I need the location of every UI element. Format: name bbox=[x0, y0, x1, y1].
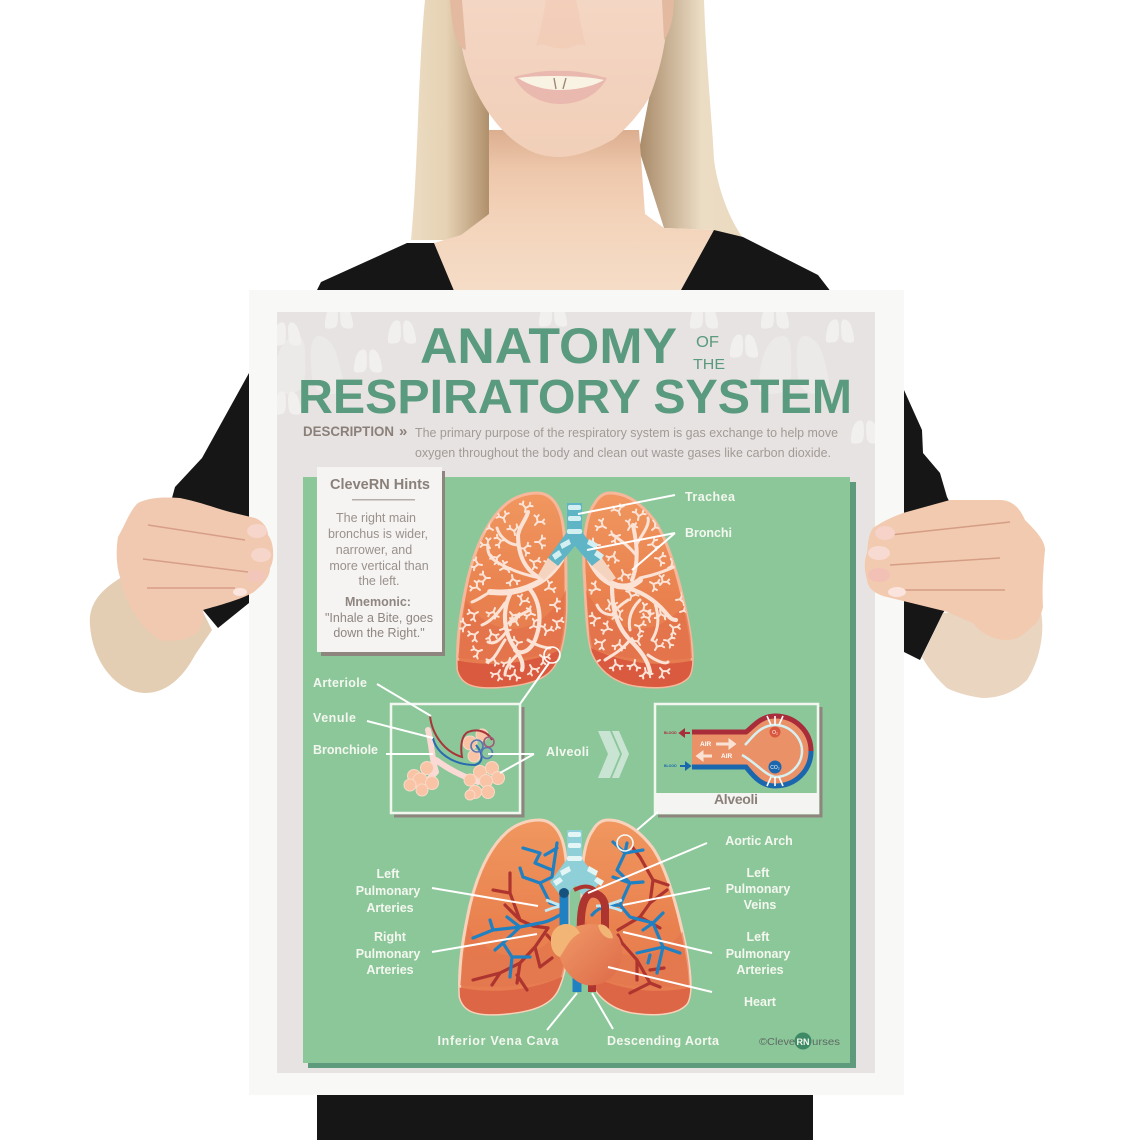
alveoli detail box right bbox=[630, 704, 821, 836]
detail circle bbox=[617, 835, 633, 851]
mouth bbox=[514, 71, 607, 104]
label: left pulmonary arteries (left side): Left bbox=[377, 867, 400, 881]
logo bbox=[759, 1032, 840, 1050]
label: left pulmonary arteries (right side): Left bbox=[747, 930, 770, 944]
green panel bbox=[303, 477, 856, 1068]
face bbox=[457, 0, 668, 157]
label: left pulmonary arteries (right side): Arteries bbox=[736, 963, 784, 977]
red vessels right bbox=[618, 848, 668, 993]
description bbox=[303, 423, 838, 460]
trachea bbox=[538, 503, 616, 582]
blood labels: BLOOD bbox=[664, 764, 677, 768]
label: aortic arch: Aortic Arch bbox=[725, 834, 793, 848]
label: left pulmonary veins: Left bbox=[747, 866, 770, 880]
card shadow bbox=[321, 471, 445, 656]
card body text: the left. bbox=[358, 574, 400, 588]
vena cava bbox=[564, 890, 577, 992]
alveolus diagram: O₂ bbox=[772, 730, 778, 736]
left forearm bbox=[90, 577, 212, 693]
black shirt shoulders bbox=[307, 230, 845, 310]
labels: alveoli bbox=[313, 676, 589, 773]
watermark lungs bbox=[273, 303, 879, 444]
air labels: AIR bbox=[721, 753, 732, 760]
air labels: AIR bbox=[700, 741, 712, 748]
leader lines bbox=[367, 684, 534, 773]
gas circles bbox=[770, 726, 780, 738]
leader lines bbox=[432, 843, 712, 1030]
label: descending aorta: Descending Aorta bbox=[607, 1034, 720, 1048]
heart bbox=[551, 924, 622, 985]
poster white frame bbox=[249, 290, 904, 1095]
label: left pulmonary arteries (right side) bbox=[726, 930, 790, 977]
label: left pulmonary veins bbox=[726, 866, 790, 912]
gas arrows bbox=[767, 716, 783, 786]
caption: Alveoli bbox=[714, 791, 758, 807]
upper lungs diagram bbox=[455, 493, 695, 695]
title "of the": THE bbox=[693, 356, 725, 373]
mnemonic: "Inhale a Bite, goes bbox=[325, 611, 433, 625]
right sleeve bbox=[904, 390, 980, 660]
twigs right bbox=[588, 503, 692, 680]
alveolus diagram bbox=[664, 716, 811, 786]
pulmonary forks bbox=[545, 900, 622, 911]
hints card bbox=[317, 467, 445, 656]
label: right pulmonary arteries bbox=[356, 930, 420, 977]
label: right pulmonary arteries: Arteries bbox=[366, 963, 414, 977]
bronchi tree right bbox=[590, 518, 678, 672]
blood labels bbox=[664, 731, 677, 768]
blue vessels right bbox=[592, 842, 680, 973]
alveoli detail box left bbox=[391, 704, 523, 816]
labels: lower lungs bbox=[356, 834, 793, 1048]
lower lungs diagram bbox=[457, 820, 693, 1022]
label: left pulmonary veins: Pulmonary bbox=[726, 882, 790, 896]
description text: The primary purpose of the respiratory system is gas exchange to help move bbox=[415, 426, 838, 440]
box frame bbox=[391, 704, 520, 813]
label: arteriole: Arteriole bbox=[313, 676, 367, 690]
card body text: bronchus is wider, bbox=[328, 527, 428, 541]
title "of the" bbox=[693, 334, 725, 373]
card body text bbox=[328, 511, 429, 588]
label: left pulmonary arteries (right side): Pulmonary bbox=[726, 947, 790, 961]
caption band bbox=[656, 793, 817, 812]
detail circle bbox=[544, 647, 560, 663]
blood arrows bbox=[680, 763, 690, 769]
trachea bbox=[550, 830, 604, 900]
air labels bbox=[700, 741, 732, 760]
left lung bbox=[457, 820, 572, 1022]
mnemonic: Mnemonic: bbox=[345, 595, 411, 609]
neck and chest bbox=[434, 130, 714, 312]
shirt bottom bbox=[317, 1090, 813, 1140]
ears bbox=[450, 0, 674, 50]
logo: RN bbox=[796, 1037, 810, 1047]
logo: urses bbox=[812, 1037, 840, 1048]
blue vessels left bbox=[473, 843, 565, 977]
hair bbox=[411, 0, 743, 240]
card title: CleveRN Hints bbox=[330, 477, 430, 493]
label: right pulmonary arteries: Pulmonary bbox=[356, 947, 420, 961]
right lung bbox=[584, 493, 695, 695]
label: right pulmonary arteries: Right bbox=[374, 930, 407, 944]
card body text: The right main bbox=[336, 511, 416, 525]
right lung bbox=[582, 820, 693, 1022]
air arrows bbox=[698, 741, 734, 759]
panel face bbox=[303, 477, 850, 1063]
poster grey panel bbox=[277, 312, 875, 1073]
poster bbox=[249, 290, 904, 1095]
card face bbox=[317, 467, 442, 652]
bronchiole tube bbox=[428, 730, 478, 782]
aorta bbox=[581, 894, 605, 992]
label: bronchi: Bronchi bbox=[685, 526, 732, 540]
description text bbox=[415, 426, 838, 460]
label: left pulmonary veins: Veins bbox=[744, 898, 776, 912]
alveoli clusters bbox=[404, 729, 504, 800]
label: bronchiole: Bronchiole bbox=[313, 743, 378, 757]
title line 2: RESPIRATORY SYSTEM bbox=[298, 371, 852, 424]
leader line: upper-lung circle to box bbox=[630, 812, 658, 836]
description label: DESCRIPTION bbox=[303, 423, 394, 439]
label: venule: Venule bbox=[313, 711, 356, 725]
bronchi tree left bbox=[472, 512, 561, 675]
blood labels: BLOOD bbox=[664, 731, 677, 735]
mnemonic: down the Right." bbox=[333, 626, 425, 640]
left sleeve bbox=[120, 373, 249, 628]
label: trachea: Trachea bbox=[685, 490, 736, 504]
left lung bbox=[455, 493, 570, 695]
mnemonic bbox=[325, 595, 433, 640]
logo: ©Cleve bbox=[759, 1037, 795, 1048]
label: left pulmonary arteries (left side): Pulmonary bbox=[356, 884, 420, 898]
labels: upper lungs bbox=[520, 490, 736, 704]
label: left pulmonary arteries (left side): Arteries bbox=[366, 901, 414, 915]
right forearm bbox=[922, 607, 1042, 698]
box frame bbox=[655, 704, 818, 813]
twigs left bbox=[460, 501, 565, 682]
title "of the": OF bbox=[696, 334, 719, 351]
capillary vessels bbox=[430, 716, 494, 765]
card body text: narrower, and bbox=[336, 543, 412, 557]
label: left pulmonary arteries (left side) bbox=[356, 867, 420, 915]
red vessels left bbox=[473, 873, 556, 990]
leader lines: trachea and bronchi bbox=[578, 495, 675, 570]
box shadow bbox=[394, 707, 523, 816]
box shadow bbox=[658, 707, 821, 816]
chevrons: » bbox=[399, 423, 407, 440]
label: alveoli: Alveoli bbox=[546, 745, 589, 759]
card divider bbox=[352, 499, 415, 500]
nose shadow bbox=[536, 0, 586, 48]
description text: oxygen throughout the body and clean out waste gases like carbon dioxide. bbox=[415, 446, 831, 460]
label: heart: Heart bbox=[744, 995, 777, 1009]
panel shadow bbox=[308, 482, 856, 1068]
arrow: double chevron bbox=[598, 731, 629, 778]
title line 1: ANATOMY bbox=[420, 318, 677, 374]
label: inferior vena cava: Inferior Vena Cava bbox=[438, 1034, 560, 1048]
title bbox=[298, 318, 852, 424]
card body text: more vertical than bbox=[329, 559, 429, 573]
alveolus diagram: CO₂ bbox=[770, 765, 780, 771]
left hand over poster edge bbox=[117, 498, 273, 641]
leader line: detail circle to box bbox=[520, 663, 549, 704]
right hand over poster edge bbox=[865, 500, 1045, 640]
